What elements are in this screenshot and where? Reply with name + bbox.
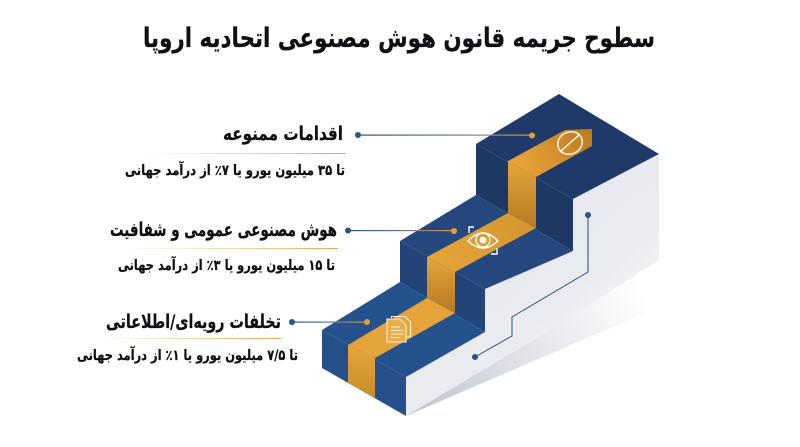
text block: prohibited practices: تا ۳۵ میلیون یورو یا ۷٪ از درآمد جهانی <box>125 161 345 179</box>
icon: prohibition sign <box>554 128 586 158</box>
top tread <box>476 94 659 199</box>
middle riser <box>400 241 485 332</box>
gold path: top riser <box>508 161 536 228</box>
text block: prohibited practices: اقدامات ممنوعه <box>223 123 343 145</box>
leader: general purpose AI <box>345 228 457 234</box>
leader: procedural violations <box>289 319 370 325</box>
text block: general purpose AI: هوش مصنوعی عمومی و شفافیت <box>110 219 337 241</box>
icon: eye with focus brackets <box>468 227 498 254</box>
side wall <box>406 154 659 416</box>
gold path: middle tread <box>427 213 536 272</box>
bottom riser <box>322 330 406 416</box>
text block: procedural violations: تا ۷/۵ میلیون یورو یا ۱٪ از درآمد جهانی <box>77 346 298 364</box>
connector: side wall line <box>472 212 591 360</box>
gold path: top tread <box>508 129 592 177</box>
text block: prohibited practices <box>125 123 346 179</box>
staircase illustration <box>322 94 662 416</box>
ground shadow <box>406 256 662 416</box>
text block: procedural violations: تخلفات رویه‌ای/اطلاعاتی <box>106 311 281 333</box>
text block: procedural violations <box>77 311 298 364</box>
top riser <box>476 144 573 251</box>
text block: general purpose AI <box>110 219 338 274</box>
gold path: middle riser <box>427 257 455 313</box>
title: سطوح جریمه قانون هوش مصنوعی اتحادیه اروپا <box>143 23 655 54</box>
text block: general purpose AI: تا ۱۵ میلیون یورو یا ۳٪ از درآمد جهانی <box>118 256 335 274</box>
middle tread <box>400 195 573 289</box>
bottom tread <box>322 282 485 377</box>
gold path: bottom riser <box>348 345 375 398</box>
icon: documents <box>387 316 410 342</box>
gold path: bottom tread <box>348 298 455 358</box>
leader: prohibited practices <box>355 132 535 138</box>
